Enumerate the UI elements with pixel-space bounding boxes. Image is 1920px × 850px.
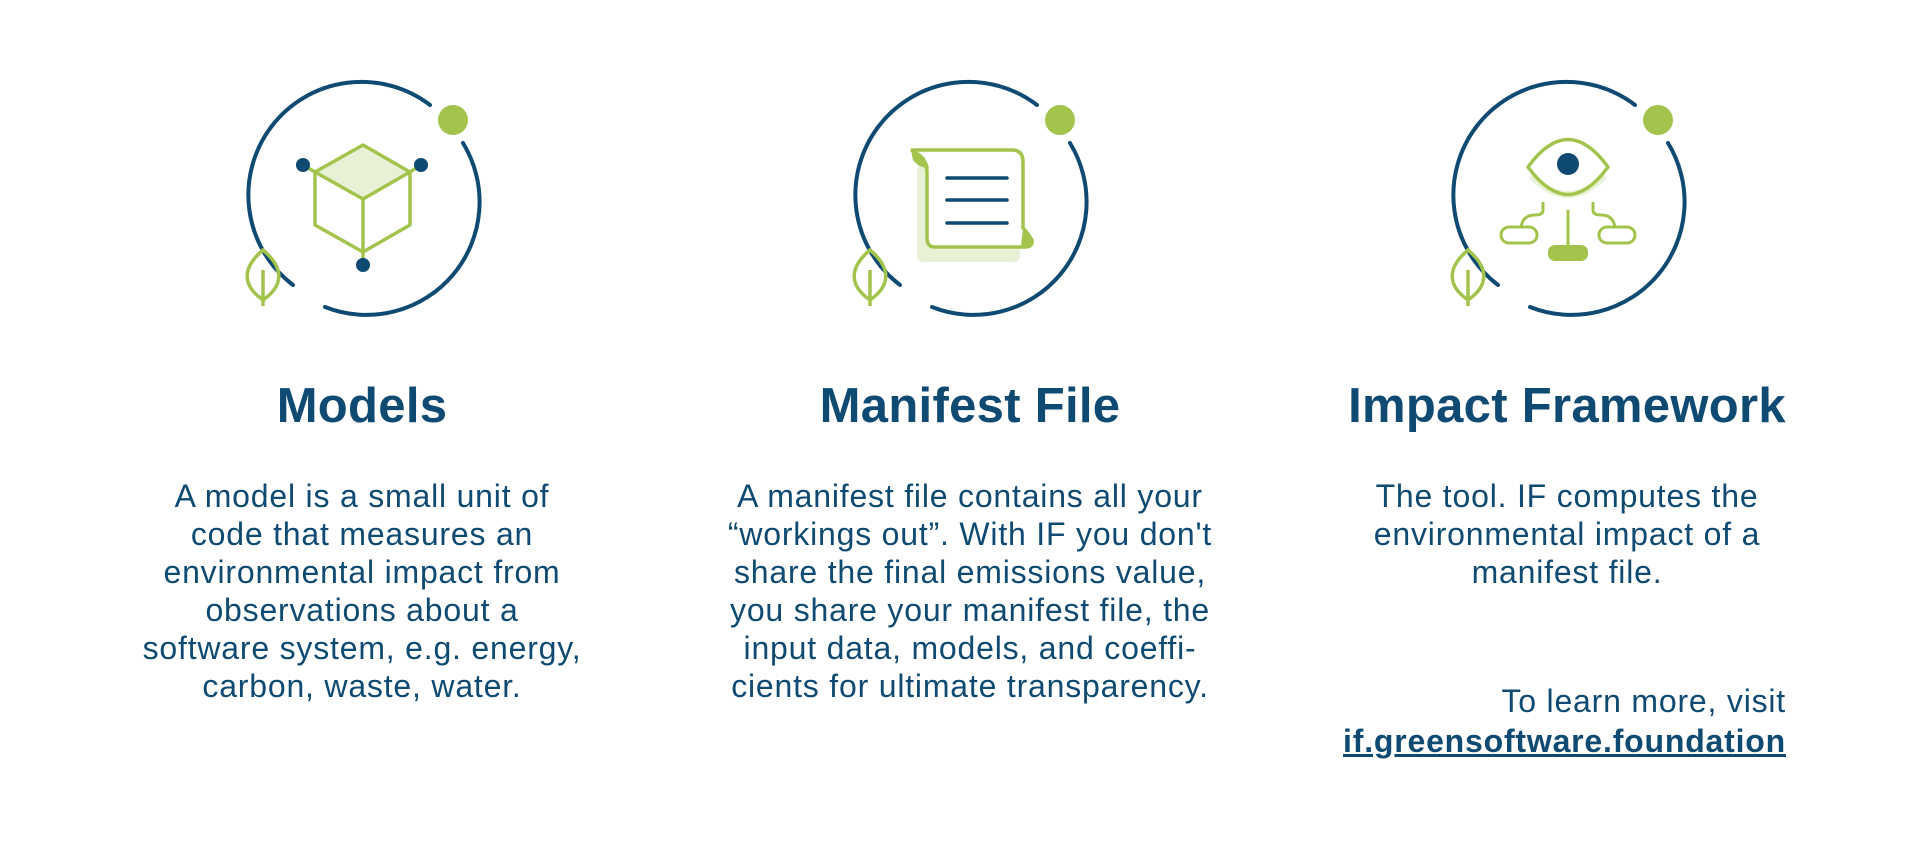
text: learn more link: To learn more, visit: [1501, 683, 1786, 719]
text: impact framework: manifest file.: [1472, 554, 1662, 590]
heading: manifest file: Manifest File: [820, 379, 1120, 433]
text: learn more link: if.greensoftware.foundation: [1343, 723, 1786, 759]
text: models: A model is a small unit of: [175, 478, 549, 514]
text: manifest file: A manifest file contains all your: [737, 478, 1203, 514]
text: manifest file: cients for ultimate transparency.: [731, 668, 1209, 704]
heading: impact framework: Impact Framework: [1348, 379, 1786, 433]
icon: models: [247, 82, 480, 315]
text: models: carbon, waste, water.: [202, 668, 522, 704]
text: manifest file: you share your manifest file, the: [730, 592, 1210, 628]
text: models: environmental impact from: [163, 554, 561, 590]
text: impact framework: The tool. IF computes the: [1376, 478, 1758, 514]
icon: manifest file: [854, 82, 1087, 315]
text: impact framework: [1374, 478, 1760, 590]
text: models: code that measures an: [191, 516, 533, 552]
text: manifest file: “workings out”. With IF you don't: [728, 516, 1212, 552]
text: impact framework: environmental impact of a: [1374, 516, 1760, 552]
text: manifest file: share the final emissions value,: [734, 554, 1206, 590]
text: models: observations about a: [205, 592, 519, 628]
text: models: [143, 478, 581, 704]
text: learn more link: [1343, 683, 1786, 759]
icon: impact framework: [1452, 82, 1685, 315]
heading: models: Models: [277, 379, 447, 433]
text: manifest file: input data, models, and coeffi-: [744, 630, 1196, 666]
text: manifest file: [728, 478, 1212, 704]
text: models: software system, e.g. energy,: [143, 630, 581, 666]
